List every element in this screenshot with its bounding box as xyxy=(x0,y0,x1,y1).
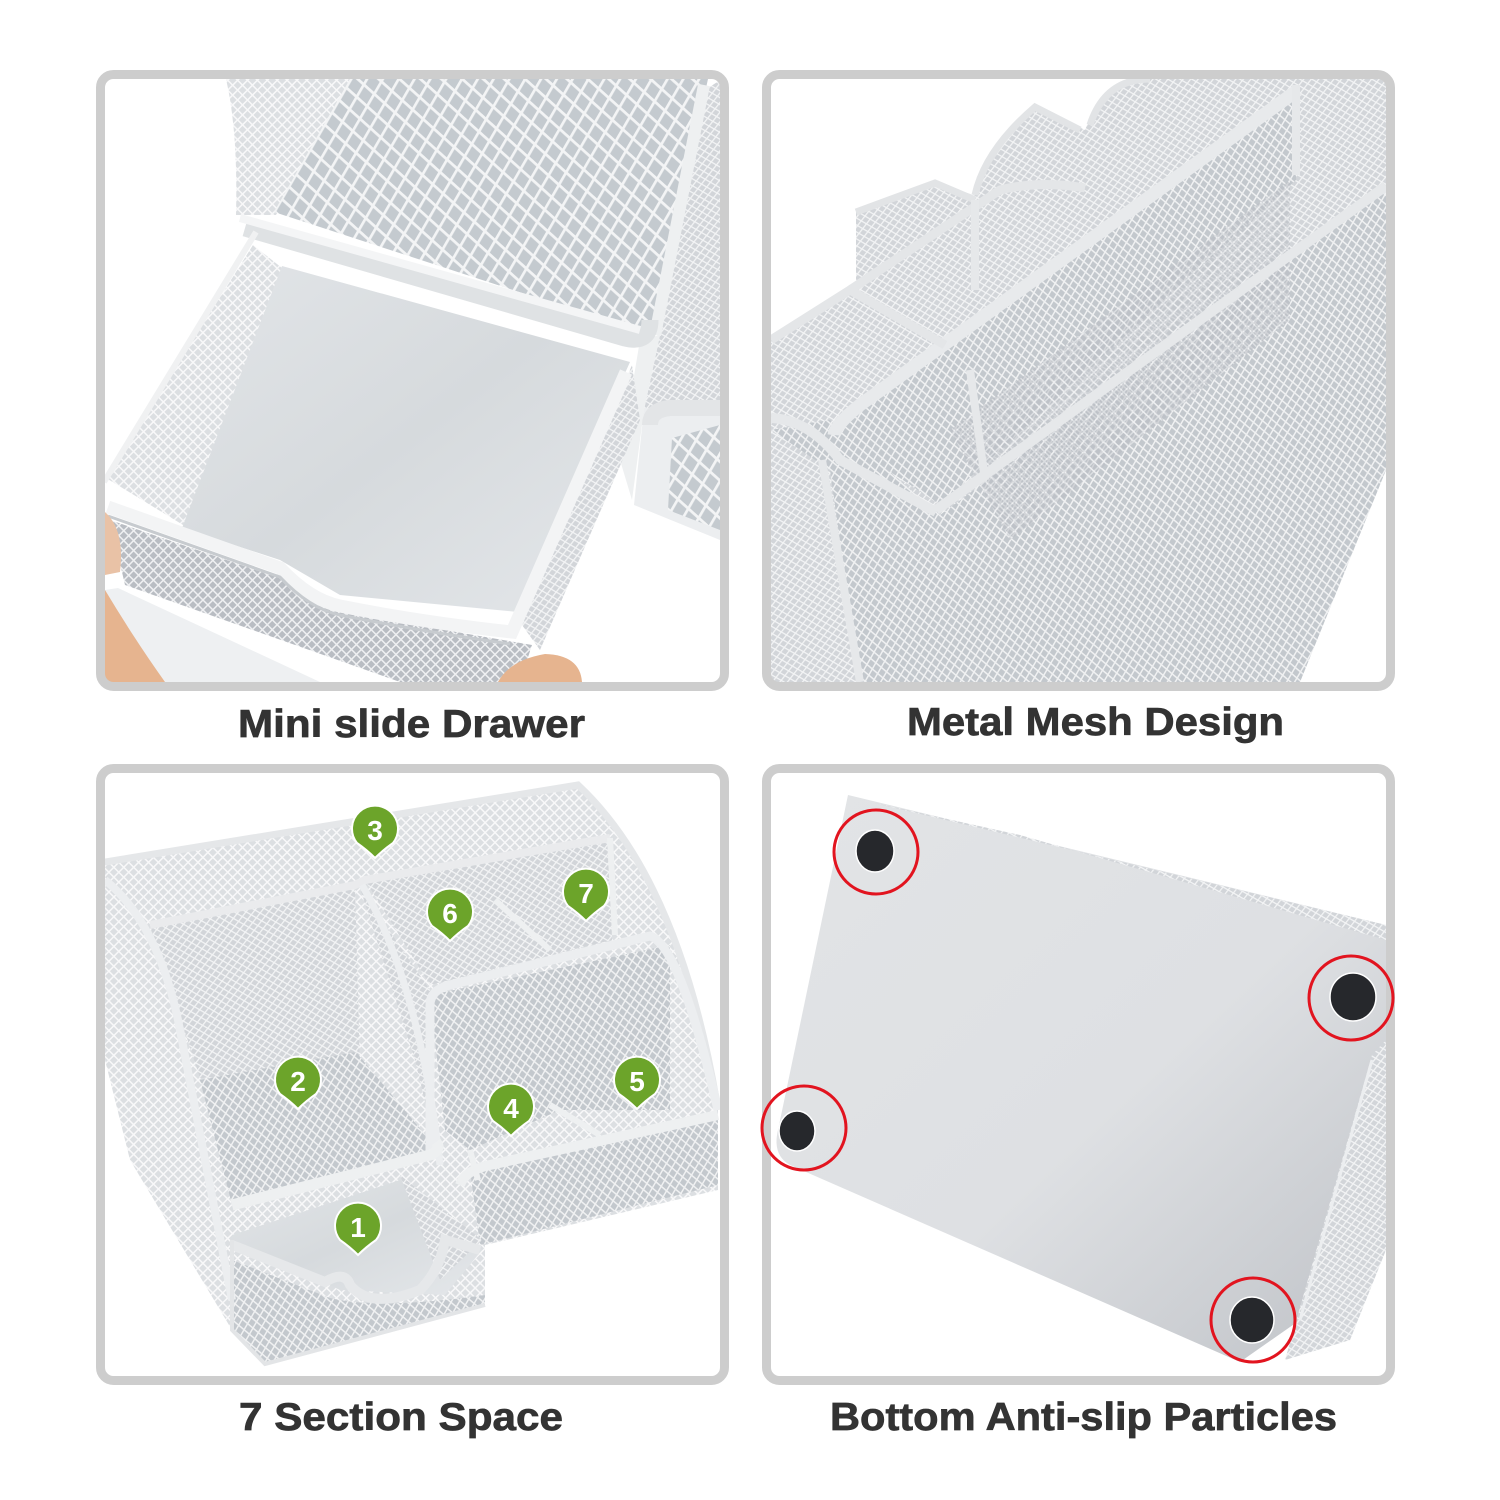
photo: mesh organizer side view xyxy=(771,79,1386,682)
caption: 7 section space: 7 Section Space xyxy=(239,1396,563,1439)
pin 2: 2 xyxy=(290,1066,306,1097)
foot 4 xyxy=(1211,1278,1295,1362)
panel: 7 section space xyxy=(100,768,724,1380)
panel: mini slide drawer xyxy=(100,74,724,686)
caption: metal mesh design: Metal Mesh Design xyxy=(907,701,1284,744)
frame xyxy=(766,74,1390,686)
pin 5 xyxy=(614,1057,660,1109)
caption: bottom anti-slip particles: Bottom Anti-slip Particles xyxy=(830,1396,1337,1439)
pin 7 xyxy=(563,869,609,921)
frame xyxy=(100,768,724,1380)
pin 4 xyxy=(488,1084,534,1136)
photo: organizer front view xyxy=(105,773,720,1376)
pin 3: 3 xyxy=(367,815,383,846)
pin 2 xyxy=(275,1057,321,1109)
caption: mini slide drawer: Mini slide Drawer xyxy=(238,703,585,746)
pin 6: 6 xyxy=(442,898,458,929)
pin 5: 5 xyxy=(629,1066,645,1097)
photo: organizer underside xyxy=(771,773,1386,1376)
frame xyxy=(766,768,1390,1380)
photo: open drawer xyxy=(104,79,722,682)
pin 4: 4 xyxy=(503,1093,519,1124)
pin 1: 1 xyxy=(350,1212,366,1243)
pin 6 xyxy=(427,889,473,941)
foot 2 xyxy=(1309,956,1393,1040)
panel: metal mesh design xyxy=(766,74,1390,686)
foot 3 xyxy=(762,1086,846,1170)
panel: bottom anti-slip particles xyxy=(762,768,1393,1380)
pin 1 xyxy=(335,1203,381,1255)
frame xyxy=(100,74,724,686)
foot 1 xyxy=(834,810,918,894)
pin 7: 7 xyxy=(578,878,594,909)
pin 3 xyxy=(352,806,398,858)
